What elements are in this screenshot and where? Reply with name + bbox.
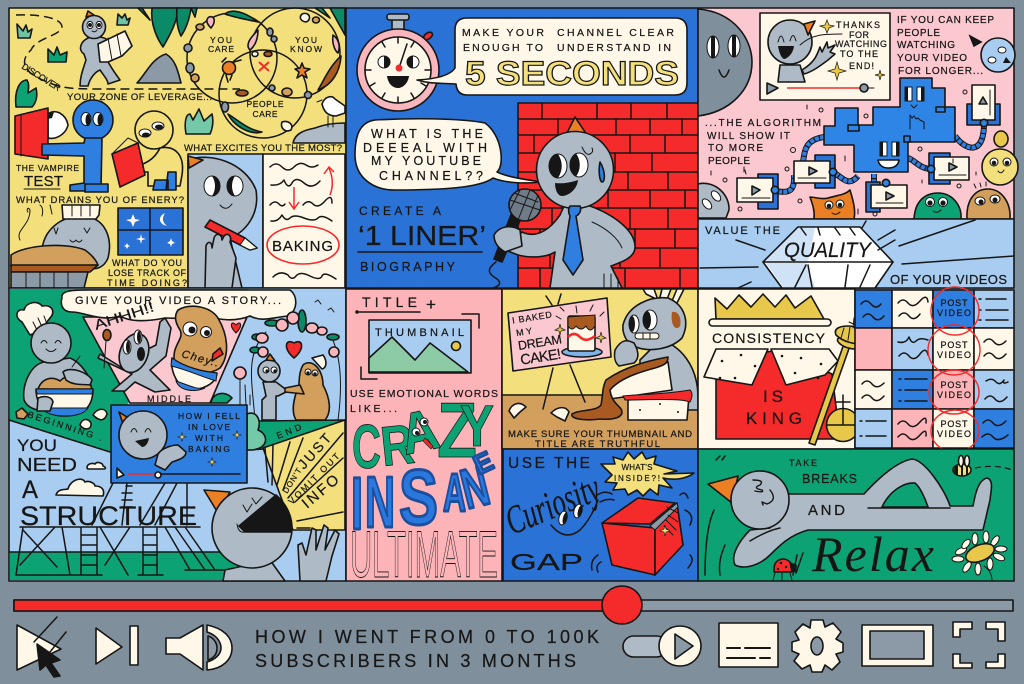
audience blobs xyxy=(698,131,1018,219)
video billboard: WITH xyxy=(195,433,223,443)
panel: title and thumbnail xyxy=(346,289,502,591)
thumbnail image xyxy=(361,314,479,379)
panel: truthful thumbnail xyxy=(502,289,698,450)
title plus: TITLE xyxy=(362,294,417,310)
sign: dream cake: CAKE! xyxy=(519,347,562,369)
video title: SUBSCRIBERS IN 3 MONTHS xyxy=(255,651,576,671)
post video entries: POST xyxy=(940,419,968,429)
video card: thanks for watching xyxy=(760,13,890,100)
blue watcher face xyxy=(970,36,1015,72)
speech bubble: 5 seconds: MAKE YOUR xyxy=(462,27,544,39)
icon: palm leaves xyxy=(138,8,345,47)
seagull and rock xyxy=(293,97,345,143)
text: create a 1 liner biography: ‘1 LINER’ xyxy=(358,220,486,251)
speech bubble: 5 seconds: UNDERSTAND IN xyxy=(557,42,671,54)
text: truthful xyxy=(508,429,692,450)
baker figure xyxy=(614,289,698,410)
crab xyxy=(222,58,241,82)
red box xyxy=(592,492,692,575)
video card: thanks for watching: FOR xyxy=(849,30,870,40)
word: insane: N xyxy=(455,453,495,521)
diamond xyxy=(763,227,893,288)
text: you need a structure: STRUCTURE xyxy=(20,501,197,531)
text: keep people watching: FOR LONGER... xyxy=(898,66,983,77)
post video entries: VIDEO xyxy=(937,390,971,400)
word: relax: Relax xyxy=(811,526,934,582)
word: curiosity: Curiosity xyxy=(499,465,606,543)
text: create a 1 liner biography: CREATE A xyxy=(359,204,441,218)
royal robe: KING xyxy=(746,409,802,428)
cookie figure xyxy=(171,306,241,390)
post video entries: VIDEO xyxy=(937,350,971,360)
yellow burst: VOMIT OUT xyxy=(286,451,342,506)
caption: beginning: BEGINNING . xyxy=(26,409,104,443)
vampire test xyxy=(15,100,113,192)
ground: end xyxy=(247,420,345,450)
panel: algorithm rewards watch time xyxy=(698,8,1018,219)
word: insane: I xyxy=(351,462,363,545)
text: algorithm will show xyxy=(705,118,821,167)
red circles around post video xyxy=(928,287,980,452)
reader figure xyxy=(112,111,183,190)
speech bubble: what is the deal: WHAT IS THE xyxy=(371,127,483,141)
word: insane xyxy=(351,446,498,545)
venn diagram of pebbles: YOU xyxy=(295,35,317,45)
diamond: QUALITY xyxy=(784,239,873,262)
cloud heading: GIVE YOUR VIDEO A STORY... xyxy=(75,295,281,307)
orb xyxy=(826,395,860,442)
clouds xyxy=(56,463,105,496)
venn diagram of pebbles: YOU xyxy=(210,35,232,45)
text: keep people watching: YOUR VIDEO xyxy=(897,53,967,64)
yellow burst: INFO xyxy=(299,471,343,512)
speech bubble: what is the deal xyxy=(355,119,541,190)
speech bubble: 5 seconds: 5 SECONDS xyxy=(465,55,679,93)
sub-panel: baking notes: BAKING xyxy=(272,238,333,255)
easel xyxy=(543,294,585,409)
text: algorithm will show: TO MORE xyxy=(708,143,763,154)
text: emotional words: LIKE... xyxy=(350,403,397,415)
post video entries: POST xyxy=(940,380,968,390)
grey face xyxy=(698,9,752,116)
post video entries xyxy=(937,298,971,439)
word: crazy: Y xyxy=(460,394,494,459)
caption: vampire test: THE VAMPIRE xyxy=(16,163,79,173)
wedding arch xyxy=(234,300,340,420)
daisy xyxy=(952,531,1007,581)
word: crazy: R xyxy=(378,412,417,478)
post video entries: VIDEO xyxy=(937,429,971,439)
icon: volume xyxy=(166,625,232,670)
vomit character xyxy=(204,488,339,581)
word: curiosity xyxy=(499,465,606,543)
text: you need a structure xyxy=(17,436,197,531)
text: keep people watching: PEOPLE xyxy=(897,28,940,39)
chef and pie xyxy=(11,205,109,288)
speech bubble: what is the deal: CHANNEL?? xyxy=(379,169,483,183)
bushes xyxy=(211,393,266,450)
chef beginning xyxy=(16,303,107,429)
progress bar xyxy=(14,586,1013,624)
sign: dream cake xyxy=(508,298,611,371)
title plus xyxy=(355,294,436,314)
caption: middle: MIDDLE xyxy=(147,394,191,404)
video billboard: IN LOVE xyxy=(188,422,230,432)
sub-panel: baking notes xyxy=(188,154,345,288)
panel: consistency is king: CONSISTENCY xyxy=(712,330,826,346)
text: algorithm will show: ...THE ALGORITHM xyxy=(705,118,821,129)
text: take breaks: TAKE xyxy=(789,458,817,468)
squiggle notes in grid xyxy=(860,297,1008,440)
speech bubble: 5 seconds: CHANNEL CLEAR xyxy=(557,27,674,39)
thumbnail image: THUMBNAIL xyxy=(375,327,464,339)
speech bubble: 5 seconds: ENOUGH TO xyxy=(463,42,543,54)
brick wall xyxy=(518,103,698,288)
scaffold xyxy=(16,486,226,575)
icon: previous with cursor xyxy=(17,617,66,677)
crown xyxy=(709,294,831,326)
icon: next xyxy=(96,626,138,665)
text: take breaks xyxy=(789,458,857,519)
royal robe: IS xyxy=(763,387,783,406)
caption: vampire test xyxy=(16,163,79,190)
video cards in network xyxy=(737,85,1000,212)
video billboard: HOW I FELL xyxy=(178,411,240,421)
rock xyxy=(137,54,181,83)
connectors xyxy=(773,120,984,192)
word: crazy: Z xyxy=(437,386,477,474)
sign: dream cake: DREAM xyxy=(517,332,563,353)
video title: HOW I WENT FROM 0 TO 100K xyxy=(255,627,599,647)
panel: take breaks and relax xyxy=(698,449,1014,582)
confetti marks xyxy=(711,90,976,216)
venn diagram of pebbles: PEOPLE xyxy=(246,99,284,109)
yellow burst: DON'T xyxy=(281,466,304,495)
yellow burst xyxy=(263,420,345,530)
caption: lose track of time: LOSE TRACK OF xyxy=(108,268,186,278)
text: keep people watching xyxy=(897,15,994,77)
caption: what drains you: WHAT DRAINS YOU OF ENERY? xyxy=(16,195,184,206)
post video entries: POST xyxy=(940,298,968,308)
icon: settings gear xyxy=(792,620,843,672)
panel: value the quality: VALUE THE xyxy=(705,225,780,237)
window at night xyxy=(118,208,183,255)
text: ULTIMATE xyxy=(350,517,498,591)
figure with map xyxy=(80,11,132,86)
text: you need a structure: NEED xyxy=(17,455,77,475)
caption: vampire test: TEST xyxy=(24,173,63,190)
red x xyxy=(259,62,269,71)
burst: what's inside xyxy=(601,452,694,496)
royal robe xyxy=(704,349,840,439)
venn diagram of pebbles xyxy=(184,8,341,138)
text: keep people watching: IF YOU CAN KEEP xyxy=(897,15,994,26)
speech bubble: 5 seconds xyxy=(417,18,687,95)
panel: curiosity gap xyxy=(499,449,698,581)
panel: consistency is king xyxy=(698,289,862,449)
text: emotional words xyxy=(350,388,498,415)
icon: plants xyxy=(16,14,213,134)
bee xyxy=(953,456,1012,476)
post video entries: VIDEO xyxy=(937,308,971,318)
word: insane: S xyxy=(399,453,438,541)
icon: captions xyxy=(719,623,778,667)
text: emotional words: USE EMOTIONAL WORDS xyxy=(350,388,498,400)
word: insane: N xyxy=(365,463,395,543)
caption: what excites you: WHAT EXCITES YOU THE MOST? xyxy=(184,143,342,154)
reclining figure xyxy=(708,459,992,567)
panel: curiosity gap: GAP xyxy=(510,549,583,575)
video card: thanks for watching: TO THE xyxy=(840,49,878,59)
scream figure: AHHH!! xyxy=(92,298,156,333)
video billboard xyxy=(92,405,247,525)
dashed route xyxy=(16,15,240,89)
text: algorithm will show: WILL SHOW IT xyxy=(707,131,790,142)
caption: discover: DISCOVER xyxy=(20,61,63,93)
word: insane: A xyxy=(443,463,466,523)
caption: lose track of time xyxy=(107,258,187,288)
word: crazy: C xyxy=(352,413,381,482)
cloud heading xyxy=(61,290,296,321)
sign: dream cake: I BAKED xyxy=(511,309,553,326)
video billboard: BAKING xyxy=(188,444,230,454)
text: truthful: MAKE SURE YOUR THUMBNAIL AND xyxy=(508,429,692,440)
calendar grid xyxy=(855,287,1014,452)
post video entries: POST xyxy=(940,340,968,350)
ladybug xyxy=(773,559,797,580)
text: take breaks: BREAKS xyxy=(802,472,857,486)
text: take breaks: AND xyxy=(808,502,845,519)
caption: end: END xyxy=(275,422,303,441)
speech bubble: what is the deal: DEEEAL WITH xyxy=(363,141,487,155)
panel: value the quality: OF YOUR VIDEOS xyxy=(890,272,1007,287)
video card: thanks for watching: END! xyxy=(849,61,874,71)
stopwatch xyxy=(357,14,439,111)
burst: what's inside: WHAT'S xyxy=(622,463,652,472)
caption: zone of leverage: YOUR ZONE OF LEVERAGE... xyxy=(67,92,212,103)
burst: what's inside: INSIDE?! xyxy=(614,474,660,483)
speech bubble: what is the deal: MY YOUTUBE xyxy=(371,154,481,168)
caption: lose track of time: WHAT DO YOU xyxy=(112,258,182,268)
blue blob algorithm creature xyxy=(824,78,955,172)
yellow burst: JUST xyxy=(294,430,335,472)
starfish xyxy=(295,63,310,78)
icon: fullscreen xyxy=(953,622,1005,668)
caption: lose track of time: TIME DOING? xyxy=(107,278,187,288)
icon: autoplay toggle xyxy=(623,626,701,666)
panel: discover your zone of leverage xyxy=(9,8,346,288)
video card: thanks for watching: WATCHING xyxy=(835,39,887,49)
text: you need a structure: A xyxy=(22,476,38,504)
venn diagram of pebbles: CARE xyxy=(208,44,234,54)
icon: theatre mode xyxy=(862,625,933,666)
title plus: + xyxy=(426,295,436,314)
word: crazy xyxy=(352,386,494,482)
text: create a 1 liner biography xyxy=(358,204,486,274)
squiggle notes xyxy=(270,163,336,279)
cookie figure: Chey.. xyxy=(180,348,220,370)
diamond rays xyxy=(700,220,1014,288)
scream figure xyxy=(92,298,171,392)
wedge: middle xyxy=(83,317,247,403)
red circled word xyxy=(267,226,339,264)
text: you need a structure: YOU xyxy=(17,436,57,455)
sign: dream cake: MY xyxy=(515,326,533,338)
character with microphone xyxy=(489,117,635,288)
panel: video story structure xyxy=(9,288,346,581)
video card: thanks for watching: THANKS xyxy=(836,20,880,30)
panel: curiosity gap: USE THE xyxy=(508,455,590,472)
melting cake xyxy=(509,357,692,421)
word: crazy: A xyxy=(394,396,445,468)
sceptre xyxy=(809,318,862,445)
text: truthful: TITLE ARE TRUTHFUL xyxy=(535,439,660,450)
word: insane: E xyxy=(469,446,498,480)
panel: five seconds channel clarity xyxy=(346,8,698,288)
text: keep people watching: WATCHING xyxy=(897,40,955,51)
venn diagram of pebbles: KNOW xyxy=(290,44,322,54)
text: algorithm will show: PEOPLE xyxy=(708,156,750,167)
video title xyxy=(255,627,599,671)
venn diagram of pebbles: CARE xyxy=(252,109,278,119)
text: create a 1 liner biography: BIOGRAPHY xyxy=(360,260,456,274)
panel: value the quality xyxy=(698,219,1014,288)
playhead xyxy=(602,586,642,624)
grass xyxy=(705,456,803,575)
